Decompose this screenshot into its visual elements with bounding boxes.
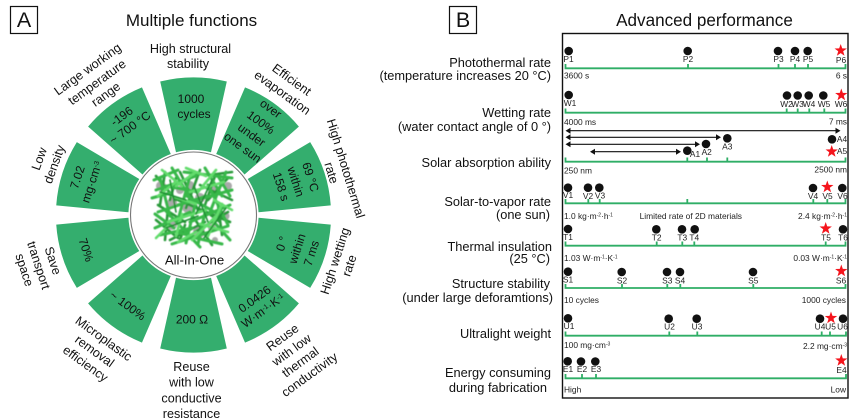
- row: photothermal rate: P1: [563, 54, 574, 64]
- sector: high wetting rate: within: [285, 232, 309, 266]
- row: wetting rate: W3: [791, 99, 804, 109]
- row: solar-to-vapor rate: V1: [563, 190, 573, 200]
- sector: high photothermal rate: within: [284, 164, 307, 199]
- row: solar-to-vapor rate: Limited rate of 2D materials: [640, 211, 742, 221]
- label: microplastic removal efficiency: efficiency: [60, 343, 111, 385]
- label: high photothermal rate: High photothermal: [324, 117, 367, 220]
- row labels: (temperature increases 20 °C): [379, 68, 551, 83]
- panel: A multiple functions: [10, 6, 367, 420]
- row: thermal insulation: ·K: [605, 253, 614, 263]
- label: high photothermal rate: rate: [321, 160, 341, 185]
- sector: save transport space: 70%: [76, 236, 96, 264]
- sector: high photothermal rate: 158 s: [270, 170, 292, 203]
- row: solar absorption ability: A5: [837, 146, 847, 156]
- row: thermal insulation: -1: [843, 254, 847, 260]
- row: structure stability: S1: [563, 274, 573, 284]
- sector: working temperature range: [86, 84, 184, 184]
- sector: thermal conductivity: [203, 246, 301, 346]
- sector: working temperature range: ~ 700 °C: [107, 108, 153, 147]
- row: thermal insulation: T3: [677, 232, 688, 242]
- row: solar-to-vapor rate: 1.0 kg·m: [564, 211, 597, 221]
- row: wetting rate: W1: [564, 98, 577, 108]
- row labels: (25 °C): [509, 251, 550, 266]
- row: thermal insulation: 0.03 W·m: [793, 253, 830, 263]
- row: solar-to-vapor rate: V3: [595, 190, 605, 200]
- row: energy consuming during fabrication: [563, 354, 847, 394]
- label: save transport space: transport: [24, 240, 53, 292]
- label: microplastic removal efficiency: Microplastic: [73, 314, 135, 364]
- label: reuse with low thermal conductivity: thermal: [279, 344, 322, 380]
- label: reuse with low conductive resistance: with low: [168, 376, 215, 390]
- sector: low density: 7.02: [67, 164, 88, 191]
- row: ultralight weight: 100 mg·cm: [564, 340, 606, 350]
- sector: conductive resistance: [160, 278, 227, 353]
- sector: high structural stability: cycles: [177, 107, 211, 121]
- row: solar-to-vapor rate: V2: [583, 191, 593, 201]
- row: wetting rate: W6: [835, 99, 848, 109]
- label: efficient evaporation: [252, 55, 322, 118]
- label: low density: Low: [29, 145, 50, 172]
- sector: low density: mg·cm: [78, 165, 103, 205]
- row: structure stability: S6: [836, 276, 846, 286]
- sector: low density: [52, 141, 144, 227]
- row: solar-to-vapor rate: -1: [608, 212, 613, 218]
- row: thermal insulation: T5: [821, 232, 831, 242]
- row: photothermal rate: P2: [683, 54, 693, 64]
- row: wetting rate: [564, 88, 848, 127]
- row: energy consuming during fabrication: Low: [831, 384, 847, 394]
- chart frame: [562, 34, 848, 398]
- row: thermal insulation: T1: [563, 232, 573, 242]
- sector: high photothermal rate: [243, 141, 335, 227]
- row: structure stability: S5: [748, 276, 759, 286]
- row: structure stability: S4: [675, 276, 685, 286]
- row: ultralight weight: U5: [825, 322, 836, 332]
- row labels: (under large deforamtions): [402, 290, 553, 305]
- row: solar absorption ability: A2: [702, 147, 712, 157]
- row: ultralight weight: -3: [606, 342, 611, 348]
- row: thermal insulation: 1.03 W·m: [564, 253, 600, 263]
- center circle: [130, 152, 256, 278]
- row: solar-to-vapor rate: V4: [808, 191, 818, 201]
- row labels: during fabrication: [449, 380, 547, 395]
- label: reuse with low conductive resistance: conductive: [161, 392, 222, 406]
- sector: thermal conductivity: -1: [276, 293, 285, 302]
- label: save transport space: space: [12, 252, 36, 288]
- row: thermal insulation: T4: [689, 232, 700, 242]
- row: solar absorption ability: A1: [690, 149, 700, 159]
- row: thermal insulation: -1: [600, 254, 605, 260]
- label: low density: density: [41, 143, 68, 186]
- sector: efficient evaporation: under: [235, 120, 268, 150]
- label: save transport space: [10, 235, 67, 296]
- panel letter A: A: [17, 8, 32, 32]
- label: save transport space: Save: [42, 245, 64, 277]
- row: structure stability: S3: [662, 276, 673, 286]
- sector: high photothermal rate: 69 °C: [299, 160, 322, 194]
- label: high wetting rate: rate: [339, 253, 359, 278]
- row: wetting rate: W5: [818, 99, 831, 109]
- row: solar absorption ability: A4: [837, 134, 847, 144]
- row: wetting rate: W4: [803, 99, 816, 109]
- panel: B advanced performance: [379, 6, 848, 398]
- label: high wetting rate: [318, 226, 367, 301]
- row: thermal insulation: [563, 222, 848, 263]
- label: high structural stability: High structural: [150, 42, 231, 56]
- row labels: [379, 55, 553, 395]
- row: ultralight weight: U6: [837, 322, 848, 332]
- row: thermal insulation: T6: [838, 232, 848, 242]
- sector: efficient evaporation: 100%: [244, 108, 278, 137]
- label: reuse with low thermal conductivity: Reuse: [264, 321, 301, 354]
- row: photothermal rate: P6: [836, 55, 846, 65]
- row: structure stability: 1000 cycles: [802, 295, 846, 305]
- row labels: Wetting rate: [482, 105, 551, 120]
- label: low density: [26, 137, 68, 186]
- label: microplastic removal efficiency: removal: [72, 332, 117, 370]
- row: structure stability: [563, 264, 847, 305]
- heading: advanced performance: Advanced performance: [616, 11, 793, 30]
- row: ultralight weight: U4: [815, 322, 826, 332]
- row: solar absorption ability: A3: [722, 142, 733, 152]
- row: photothermal rate: 3600 s: [564, 70, 589, 80]
- row labels: Solar-to-vapor rate: [444, 194, 551, 209]
- row: energy consuming during fabrication: E3: [591, 364, 601, 374]
- row: solar-to-vapor rate: ·h: [601, 211, 609, 221]
- row: solar absorption ability: 2500 nm: [814, 164, 847, 174]
- label: reuse with low thermal conductivity: with low: [269, 331, 315, 370]
- sector: conductive resistance: 200 Ω: [176, 312, 208, 326]
- label: high structural stability: [150, 42, 231, 71]
- icon: green all-in-one aerogel cube: [152, 168, 232, 247]
- row: ultralight weight: 2.2 mg·cm: [803, 341, 843, 351]
- label: large working temperature range: [52, 40, 142, 123]
- row: photothermal rate: P5: [803, 54, 813, 64]
- sector: high wetting rate: 7 ms: [301, 239, 322, 268]
- row labels: Thermal insulation: [447, 239, 552, 254]
- row: photothermal rate: [563, 44, 847, 80]
- row: ultralight weight: -3: [843, 342, 847, 348]
- row: structure stability: S2: [617, 276, 627, 286]
- row: ultralight weight: U2: [664, 322, 675, 332]
- row: solar-to-vapor rate: -2: [831, 212, 835, 218]
- label: microplastic removal efficiency: [54, 314, 135, 389]
- panel letter B: B: [456, 8, 470, 32]
- sector: save transport space: [52, 203, 144, 289]
- sector: thermal conductivity: 0.0426: [236, 282, 274, 316]
- row: photothermal rate: 6 s: [836, 70, 847, 80]
- row: photothermal rate: P4: [790, 54, 800, 64]
- row labels: Photothermal rate: [449, 55, 551, 70]
- row: wetting rate: W2: [780, 99, 793, 109]
- row: solar-to-vapor rate: ·h: [835, 211, 843, 221]
- sector: microplastic removal: ~ 100%: [107, 288, 149, 324]
- row: solar-to-vapor rate: -2: [597, 212, 601, 218]
- row: solar absorption ability: [564, 128, 847, 176]
- sector: high wetting rate: 0 °: [273, 234, 291, 253]
- row: ultralight weight: U1: [564, 321, 575, 331]
- sector: efficient evaporation: over: [257, 96, 284, 121]
- row labels: (one sun): [496, 207, 550, 222]
- label: large working temperature range: range: [89, 79, 123, 110]
- row: solar-to-vapor rate: 2.4 kg·m: [798, 211, 831, 221]
- row: solar-to-vapor rate: V6: [837, 191, 848, 201]
- row: solar-to-vapor rate: V5: [822, 191, 833, 201]
- label: efficient evaporation: Efficient: [270, 61, 314, 99]
- label: all-in-one: All-In-One: [165, 252, 224, 268]
- sector: thermal conductivity: -1: [261, 303, 270, 313]
- label: reuse with low thermal conductivity: conductivity: [279, 349, 341, 400]
- row: energy consuming during fabrication: E4: [836, 365, 847, 375]
- sector: efficient evaporation: one sun: [221, 129, 264, 166]
- sector: thermal conductivity: W·m: [239, 305, 267, 331]
- label: large working temperature range: temperature: [66, 57, 129, 108]
- sector: efficient evaporation: [203, 84, 301, 184]
- row labels: Structure stability: [452, 276, 551, 291]
- sector: high structural stability: [160, 77, 227, 152]
- panel letter A: [10, 6, 38, 34]
- heading: multiple functions: Multiple functions: [126, 11, 257, 30]
- sector: working temperature range: -196: [108, 103, 136, 129]
- panel letter B: [450, 6, 476, 34]
- row: energy consuming during fabrication: E2: [577, 364, 587, 374]
- row labels: Ultralight weight: [460, 326, 551, 341]
- row: energy consuming during fabrication: High: [564, 384, 582, 394]
- label: high structural stability: stability: [167, 57, 210, 71]
- row: wetting rate: 4000 ms: [564, 117, 596, 127]
- sector: low density: -3: [93, 160, 101, 168]
- row: thermal insulation: -1: [830, 254, 834, 260]
- label: reuse with low thermal conductivity: [252, 312, 341, 400]
- row: wetting rate: 7 ms: [829, 116, 847, 126]
- row: solar absorption ability: 250 nm: [564, 166, 592, 176]
- row: solar-to-vapor rate: [563, 180, 848, 221]
- label: reuse with low conductive resistance: Reuse: [173, 360, 210, 374]
- row: photothermal rate: P3: [773, 54, 784, 64]
- row labels: Energy consuming: [445, 365, 551, 380]
- row: thermal insulation: ·K: [834, 253, 843, 263]
- row: ultralight weight: [564, 312, 848, 351]
- row: solar-to-vapor rate: -1: [843, 212, 847, 218]
- row: thermal insulation: T2: [652, 232, 662, 242]
- label: large working temperature range: Large working: [52, 40, 124, 98]
- label: high wetting rate: High wetting: [318, 226, 353, 296]
- row labels: Solar absorption ability: [422, 155, 552, 170]
- sector: high wetting rate: [243, 203, 335, 289]
- sector: high structural stability: 1000: [178, 92, 205, 106]
- row: thermal insulation: -1: [613, 254, 618, 260]
- row: energy consuming during fabrication: E1: [563, 364, 573, 374]
- row labels: (water contact angle of 0 °): [398, 119, 551, 134]
- row: structure stability: 10 cycles: [564, 295, 599, 305]
- sector: thermal conductivity: ·K: [264, 294, 282, 312]
- label: reuse with low conductive resistance: [161, 360, 222, 420]
- sector: microplastic removal: [86, 246, 184, 346]
- label: efficient evaporation: evaporation: [252, 68, 313, 118]
- row: ultralight weight: U3: [692, 322, 703, 332]
